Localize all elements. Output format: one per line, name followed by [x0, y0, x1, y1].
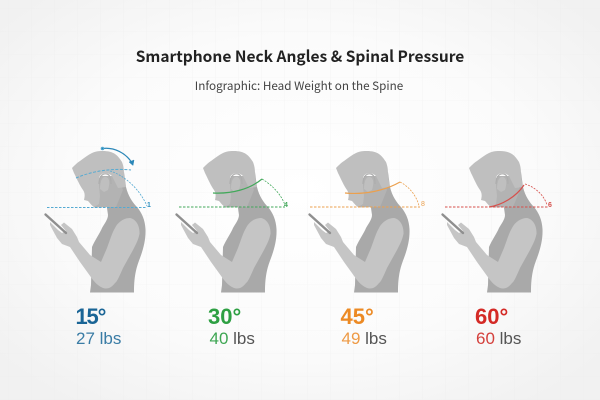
angle label: 4 — [284, 202, 288, 209]
subtitle: Infographic: Head Weight on the Spine — [195, 77, 403, 94]
angle guides — [310, 182, 420, 207]
stat: 45 degrees: 49 lbs — [342, 329, 387, 348]
angle label: 6 — [548, 202, 552, 209]
figure: 45 degrees — [310, 151, 425, 292]
stat: 15 degrees — [76, 304, 121, 348]
silhouette — [442, 151, 543, 292]
figure: 30 degrees — [176, 151, 288, 292]
stat: 45 degrees: 45° — [340, 304, 374, 329]
silhouette — [176, 151, 277, 292]
stat: 30 degrees: 30° — [208, 304, 241, 329]
angle label: 1 — [147, 202, 151, 209]
silhouette — [46, 151, 146, 292]
angle guides — [47, 147, 147, 208]
stat: 60 degrees — [475, 304, 521, 348]
figure: 60 degrees — [442, 151, 552, 292]
stat: 15 degrees: 27 lbs — [76, 329, 121, 348]
angle guides — [179, 179, 285, 207]
stat: 30 degrees — [208, 304, 255, 348]
stat: 60 degrees: 60 lbs — [476, 329, 521, 348]
stat: 15 degrees: 15° — [76, 304, 106, 329]
angle guides — [445, 184, 548, 207]
stat: 45 degrees — [340, 304, 387, 348]
title: Smartphone Neck Angles & Spinal Pressure — [136, 45, 464, 67]
stat: 60 degrees: 60° — [475, 304, 508, 329]
stat: 30 degrees: 40 lbs — [210, 329, 255, 348]
angle label: 8 — [421, 201, 425, 208]
figure: 15 degrees — [46, 147, 151, 292]
silhouette — [310, 151, 410, 292]
